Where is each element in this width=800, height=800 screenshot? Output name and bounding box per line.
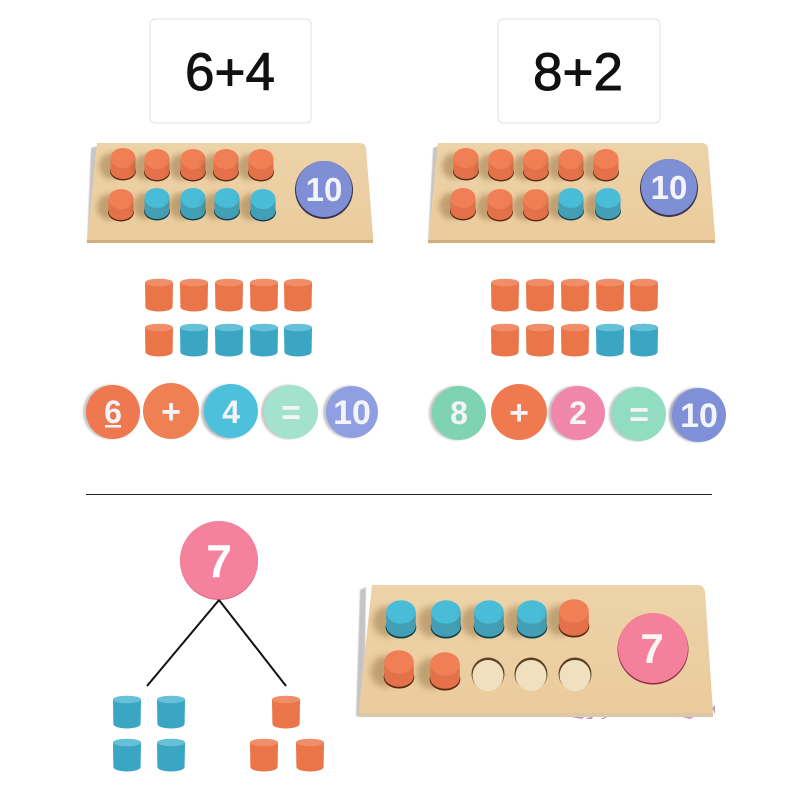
wooden board: 6+4 [87, 143, 373, 243]
counting cylinders: 6+4 [145, 279, 312, 356]
three orange cylinders [250, 696, 324, 772]
divider line [86, 494, 712, 495]
counting cylinders: 8+2 [491, 279, 658, 356]
wooden board: 7 [356, 585, 715, 719]
number bond: 7 disc: 7 [206, 535, 232, 587]
equation discs: 8 + 2 = 10: 2 [569, 395, 587, 431]
number bond: 7 disc [180, 521, 258, 600]
equation discs: 8 + 2 = 10: 8 [450, 395, 468, 431]
card: 6+4: 6+4 [185, 43, 275, 102]
equation discs: 6 + 4 = 10: 4 [222, 394, 240, 430]
equation discs: 6 + 4 = 10 [83, 383, 378, 439]
equation discs: 8 + 2 = 10 [429, 384, 726, 442]
card: 8+2 [498, 19, 660, 123]
equation discs: 8 + 2 = 10: + [509, 394, 529, 432]
equation discs: 8 + 2 = 10: = [629, 396, 649, 434]
wooden board: 8+2 [428, 143, 715, 243]
four blue cylinders [113, 696, 185, 772]
equation discs: 6 + 4 = 10: = [281, 394, 301, 432]
wooden board: 8+2: 10 [651, 169, 687, 206]
card: 6+4 [150, 19, 311, 123]
bond lines [147, 600, 286, 686]
equation discs: 8 + 2 = 10: 10 [680, 397, 718, 435]
card: 8+2: 8+2 [533, 43, 623, 102]
wooden board: 6+4: 10 [306, 171, 342, 208]
equation discs: 6 + 4 = 10: 6 [104, 394, 122, 430]
pink and purple print under the board [565, 705, 715, 719]
equation discs: 6 + 4 = 10: 10 [333, 394, 371, 432]
wooden board: 7: 7 [640, 625, 664, 672]
equation discs: 6 + 4 = 10: + [161, 393, 181, 431]
